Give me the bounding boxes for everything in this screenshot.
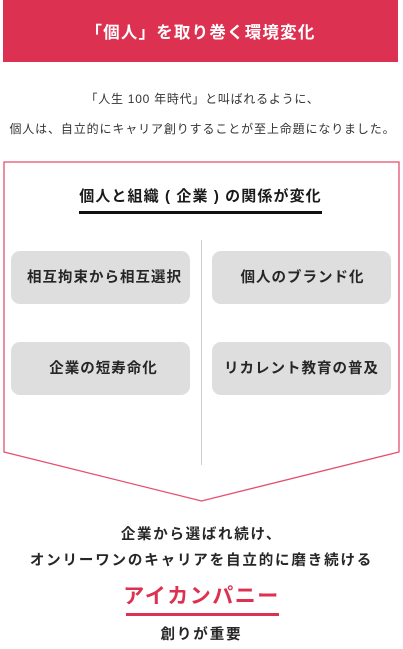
highlight underline [126, 613, 279, 616]
header banner [3, 0, 398, 62]
pill: personal branding: 個人のブランド化 [240, 270, 364, 286]
pill: personal branding [212, 251, 391, 304]
pill: recurrent education: リカレント教育の普及 [224, 361, 379, 377]
pill: mutual selection [11, 251, 190, 304]
intro line 1: 「人生 100 年時代」と叫ばれるように、 [85, 92, 320, 106]
pill: short company lifespan: 企業の短寿命化 [49, 361, 158, 377]
pill: recurrent education [212, 342, 391, 395]
title: 「個人」を取り巻く環境変化 [85, 24, 316, 42]
pill: mutual selection: 相互拘束から相互選択 [27, 270, 182, 286]
intro line 2: 個人は、自立的にキャリア創りすることが至上命題になりました。 [9, 122, 396, 136]
intro text [9, 92, 396, 136]
closing text: 創りが重要 [160, 627, 242, 643]
panel heading: 個人と組織 ( 企業 ) の関係が変化 [79, 188, 322, 205]
heading underline [79, 211, 322, 214]
center divider [201, 240, 202, 465]
pill: short company lifespan [11, 342, 190, 395]
highlighted term: アイカンパニー [123, 585, 280, 608]
conclusion line 2: オンリーワンのキャリアを自立的に磨き続ける [30, 553, 373, 569]
conclusion line 1: 企業から選ばれ続け、 [121, 527, 282, 543]
